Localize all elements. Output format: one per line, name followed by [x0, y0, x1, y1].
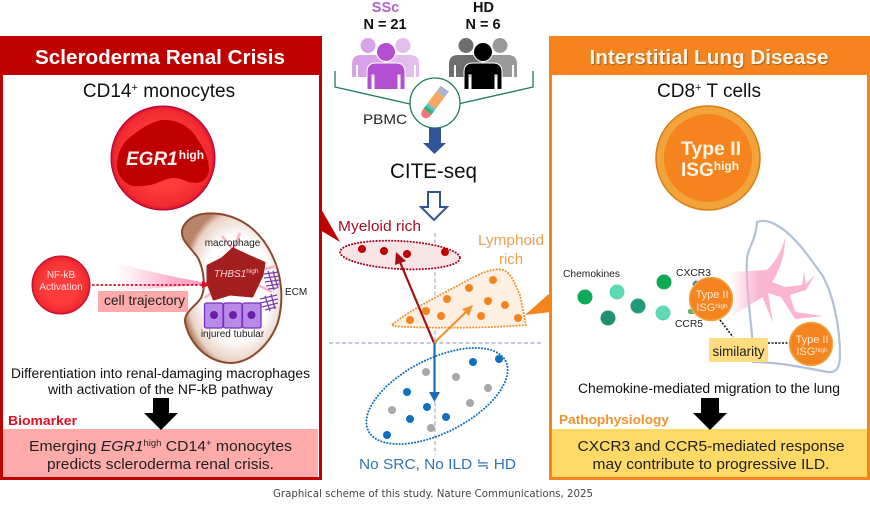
no SRC no ILD label: No SRC, No ILD ≒ HD [359, 456, 516, 473]
left conclusion box: predicts scleroderma renal crisis. [47, 456, 274, 473]
HD cohort label: HD [473, 0, 494, 16]
left conclusion box: + [206, 438, 212, 448]
lymphoid rich label: Lymphoid [478, 232, 544, 249]
left heading: Scleroderma Renal Crisis [35, 47, 285, 69]
lymphoid rich label: rich [499, 251, 523, 268]
arrow: down to pathophysiology [693, 398, 727, 430]
lymphoid cluster [393, 269, 526, 328]
callout pointer: red [320, 207, 340, 242]
right heading: Interstitial Lung Disease [590, 47, 828, 69]
cell trajectory wedge [115, 262, 212, 291]
left description: with activation of the NF-kB pathway [47, 382, 273, 397]
panel: scleroderma renal crisis [0, 36, 321, 478]
pathophysiology label: Pathophysiology [559, 412, 670, 427]
left description: Differentiation into renal-damaging macrophages [11, 366, 310, 381]
icon: NF-kB activation circle: Activation [39, 282, 83, 293]
icon: lung [730, 221, 840, 372]
ECM fibres [260, 271, 280, 311]
subheading: CD14 monocytes: monocytes [138, 81, 235, 102]
left header bar [0, 36, 321, 75]
callout pointer: orange [525, 292, 551, 315]
left description [11, 366, 310, 397]
subheading: CD14 monocytes: + [131, 82, 138, 94]
icon: SSc patients [352, 38, 419, 90]
CCR5 label: CCR5 [675, 319, 703, 330]
subheading: CD8 T cells: + [695, 82, 701, 94]
bracket [335, 71, 533, 104]
myeloid rich label: Myeloid rich [338, 218, 421, 235]
icon: kidney [182, 213, 281, 363]
left conclusion box: high [144, 438, 161, 448]
arrow: hollow down [421, 192, 447, 220]
left conclusion box: CD14 [161, 438, 206, 455]
cell trajectory label [98, 291, 188, 312]
icon: kidney: injured tubular [201, 329, 265, 340]
right header bar [549, 36, 870, 75]
macrophage processes [205, 233, 276, 298]
icon: type II ISG high cell [656, 106, 760, 210]
arrow: lymphoid vector [434, 305, 473, 343]
migrating T cell with receptors: ISG [696, 302, 715, 314]
icon: healthy donors [449, 38, 517, 90]
left conclusion box: Emerging EGR1 [29, 438, 142, 455]
icon: kidney: macrophage [205, 238, 261, 249]
cell trajectory label: cell trajectory [104, 292, 185, 308]
arrow: dotted trajectory [92, 281, 212, 288]
chemokine dots [578, 274, 672, 326]
T cell in lung [790, 322, 832, 366]
migrating T cell with receptors: Type II [695, 289, 729, 301]
HD cohort label: N = 6 [465, 17, 501, 33]
icon: type II ISG high cell: ISG [681, 160, 714, 181]
right description: Chemokine-mediated migration to the lung [578, 381, 840, 396]
CITE-seq label: CITE-seq [390, 160, 477, 183]
right conclusion box: CXCR3 and CCR5-mediated response [578, 438, 844, 455]
similarity label [709, 338, 768, 362]
bronchi trunk [730, 270, 772, 317]
arrow: myeloid vector [395, 252, 434, 343]
similarity connectors [720, 320, 790, 343]
migrating T cell with receptors: high [715, 303, 728, 310]
icon: kidney: high [246, 268, 259, 275]
HD cohort label [465, 0, 501, 33]
SSc cohort label: N = 21 [363, 17, 407, 33]
icon: EGR1 high monocyte: EGR1 [126, 149, 178, 170]
CXCR3 label: CXCR3 [676, 268, 711, 279]
icon: NF-kB activation circle [32, 256, 90, 314]
similarity label: similarity [712, 343, 764, 359]
migrating T cell with receptors [688, 278, 732, 320]
panel: interstitial lung disease [549, 36, 870, 478]
icon: type II ISG high cell: high [714, 159, 739, 173]
injured tubular cells [204, 303, 261, 328]
no SRC no ILD cluster [352, 328, 522, 464]
left conclusion box [3, 429, 318, 477]
icon: type II ISG high cell: Type II [681, 139, 741, 160]
T cell in lung: Type II [795, 334, 829, 346]
caption: Graphical scheme of this study. Nature Communications, 2025 [273, 488, 593, 500]
T cell in lung: high [815, 347, 828, 354]
icon: NF-kB activation circle: NF-kB [47, 270, 75, 281]
right conclusion box [552, 429, 867, 477]
lymphoid rich label [478, 232, 544, 268]
chemokines label: Chemokines [563, 269, 620, 280]
left conclusion box: monocytes [212, 438, 292, 455]
icon: EGR1 high monocyte [111, 106, 215, 210]
scatter plot [329, 233, 541, 464]
T cell in lung: ISG [796, 346, 815, 358]
arrow: down to biomarker [144, 398, 178, 430]
subheading: CD8 T cells: T cells [701, 81, 761, 102]
macrophage cell [208, 249, 264, 299]
SSc cohort label [363, 0, 407, 33]
subheading: CD14 monocytes: CD14 [83, 81, 131, 102]
SSc cohort label: SSc [372, 0, 399, 16]
icon: kidney: THBS1 [214, 269, 246, 280]
axes [329, 233, 541, 455]
icon: EGR1 high monocyte: high [179, 148, 204, 162]
right conclusion box: may contribute to progressive ILD. [592, 456, 830, 473]
myeloid cluster [339, 238, 461, 272]
PBMC label: PBMC [363, 111, 407, 127]
arrow: to CITE-seq [423, 128, 446, 154]
bronchi branches [762, 238, 823, 323]
icon: PBMC tube [410, 78, 460, 128]
ECM label: ECM [285, 287, 307, 298]
biomarker label: Biomarker [8, 413, 77, 428]
subheading: CD8 T cells: CD8 [657, 81, 695, 102]
arrow: blue vector [429, 343, 440, 402]
